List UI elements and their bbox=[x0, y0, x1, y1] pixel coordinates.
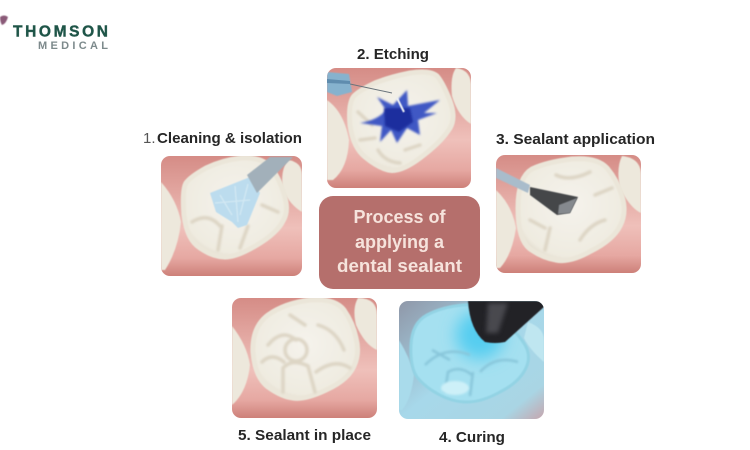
panel: step 2 etching bbox=[327, 68, 471, 188]
cusp lines bbox=[425, 350, 518, 396]
panel: step 3 sealant application bbox=[496, 155, 641, 273]
sealant brush bbox=[496, 168, 578, 215]
panel: step 1 cleaning bbox=[161, 156, 302, 276]
sealant highlight bbox=[441, 381, 469, 395]
heading: step 2 etching: 2. Etching bbox=[357, 46, 429, 63]
heading: step 3 sealant application: 3. Sealant application bbox=[496, 131, 655, 148]
logo: Thomson Medical bbox=[0, 16, 108, 52]
cleaning spray bbox=[210, 177, 260, 228]
etching syringe bbox=[327, 72, 392, 96]
curing lamp bbox=[468, 301, 545, 343]
cleaning nozzle bbox=[247, 157, 293, 193]
logo wordmark Medical: MEDICAL bbox=[38, 40, 108, 52]
curing light glow bbox=[456, 311, 504, 359]
title text: Process of bbox=[353, 207, 447, 227]
occlusal ridges bbox=[262, 315, 350, 392]
panel: step 5 sealant in place bbox=[232, 298, 377, 418]
title line 3: dental sealant bbox=[337, 256, 462, 276]
logo wordmark Thomson: THOMSON bbox=[13, 24, 108, 40]
title line 2: applying a bbox=[355, 232, 445, 252]
heading: step 4: 4. Curing bbox=[439, 429, 505, 446]
icon: logo mark bbox=[0, 16, 8, 25]
heading: step 5: 5. Sealant in place bbox=[238, 427, 371, 444]
panel: step 4 curing bbox=[399, 301, 545, 419]
heading: step 1 cleaning: 1. bbox=[143, 130, 156, 147]
etching gel bbox=[360, 90, 440, 143]
panel: title callout bbox=[319, 196, 480, 289]
heading: step 1 cleaning: Cleaning & isolation bbox=[157, 130, 302, 147]
